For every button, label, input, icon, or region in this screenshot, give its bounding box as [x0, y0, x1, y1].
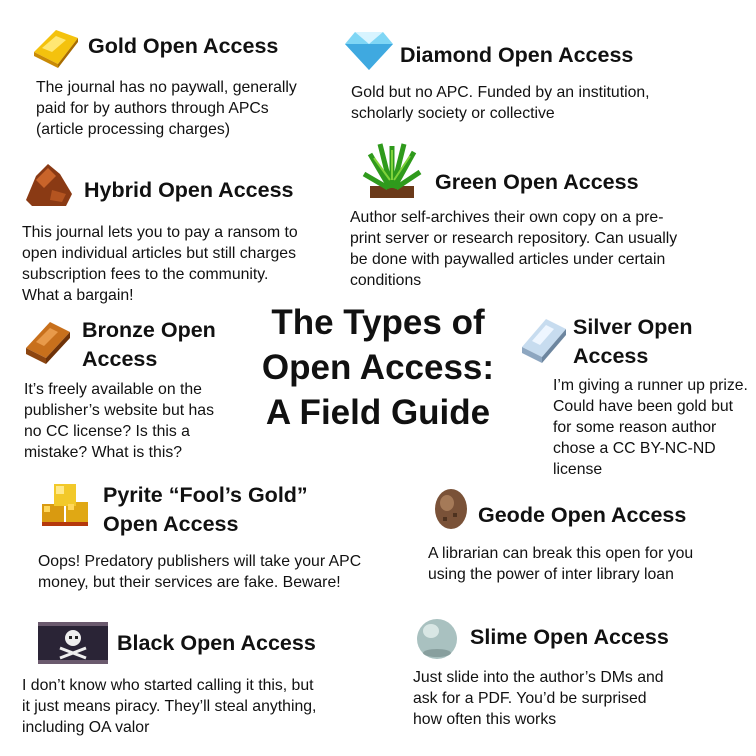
title: The Types of — [271, 303, 485, 342]
title: A Field Guide — [266, 393, 490, 432]
text: silver: for some reason author — [553, 419, 716, 436]
text: pyrite: money, but their services are fake. Beware! — [38, 574, 341, 591]
text: pyrite — [38, 553, 361, 591]
text: geode: using the power of inter library loan — [428, 566, 674, 583]
text: green: Author self-archives their own copy on a pre- — [350, 209, 663, 226]
text: silver: I’m giving a runner up prize. — [553, 377, 748, 394]
heading: black: Black Open Access — [117, 631, 316, 655]
text: slime: ask for a PDF. You’d be surprised — [413, 690, 647, 707]
text: diamond: Gold but no APC. Funded by an institution, — [351, 84, 650, 101]
heading: pyrite: Open Access — [103, 512, 238, 536]
heading: silver — [573, 315, 692, 368]
text: diamond: scholarly society or collective — [351, 105, 555, 122]
heading: gold: Gold Open Access — [88, 34, 278, 58]
heading: bronze — [82, 318, 216, 371]
text: hybrid: What a bargain! — [22, 287, 134, 304]
icon: pirate flag — [38, 622, 108, 664]
title: Open Access: — [262, 348, 494, 387]
text: black: including OA valor — [22, 719, 149, 736]
heading: silver: Access — [573, 344, 648, 368]
icon: slime — [417, 619, 457, 659]
heading: diamond: Diamond Open Access — [400, 43, 633, 67]
text: gold: The journal has no paywall, generally — [36, 79, 297, 96]
text: bronze: publisher’s website but has — [24, 402, 214, 419]
text: geode: A librarian can break this open for you — [428, 545, 693, 562]
text: slime: how often this works — [413, 711, 556, 728]
text: bronze — [24, 381, 214, 461]
heading: geode: Geode Open Access — [478, 503, 686, 527]
text: green: conditions — [350, 272, 421, 289]
title — [262, 303, 494, 432]
text: diamond — [351, 84, 650, 122]
icon: gold bar — [34, 30, 78, 68]
text: black — [22, 677, 316, 736]
heading: bronze: Access — [82, 347, 157, 371]
icon: bronze bar — [26, 322, 70, 364]
text: gold: (article processing charges) — [36, 121, 230, 138]
text: silver: license — [553, 461, 602, 478]
heading: bronze: Bronze Open — [82, 318, 216, 342]
icon: diamond — [345, 32, 393, 70]
text: pyrite: Oops! Predatory publishers will take your APC — [38, 553, 361, 570]
text: bronze: It’s freely available on the — [24, 381, 202, 398]
text: silver: Could have been gold but — [553, 398, 733, 415]
icon: hybrid rock — [26, 164, 72, 206]
text: slime: Just slide into the author’s DMs and — [413, 669, 664, 686]
text: silver — [553, 377, 748, 478]
text: geode — [428, 545, 693, 583]
text: hybrid: subscription fees to the community. — [22, 266, 268, 283]
heading: pyrite — [103, 483, 308, 536]
text: black: I don’t know who started calling it this, but — [22, 677, 314, 694]
text: slime — [413, 669, 664, 728]
heading: green: Green Open Access — [435, 170, 639, 194]
text: gold — [36, 79, 297, 138]
text: hybrid: This journal lets you to pay a ransom to — [22, 224, 298, 241]
text: silver: chose a CC BY-NC-ND — [553, 440, 716, 457]
text: hybrid: open individual articles but still charges — [22, 245, 296, 262]
heading: pyrite: Pyrite “Fool’s Gold” — [103, 483, 308, 507]
heading: hybrid: Hybrid Open Access — [84, 178, 294, 202]
text: bronze: no CC license? Is this a — [24, 423, 190, 440]
heading: silver: Silver Open — [573, 315, 692, 339]
icon: green plant — [362, 143, 422, 198]
icon: pyrite — [42, 484, 88, 526]
text: black: it just means piracy. They’ll steal anything, — [22, 698, 316, 715]
text: hybrid — [22, 224, 298, 304]
text: gold: paid for by authors through APCs — [36, 100, 269, 117]
text: green: print server or research repository. Can usually — [350, 230, 677, 247]
icon: geode — [435, 489, 467, 529]
text: bronze: mistake? What is this? — [24, 444, 182, 461]
heading: slime: Slime Open Access — [470, 625, 669, 649]
text: green — [350, 209, 678, 289]
text: green: be done with paywalled articles under certain — [350, 251, 665, 268]
icon: silver bar — [522, 319, 566, 363]
